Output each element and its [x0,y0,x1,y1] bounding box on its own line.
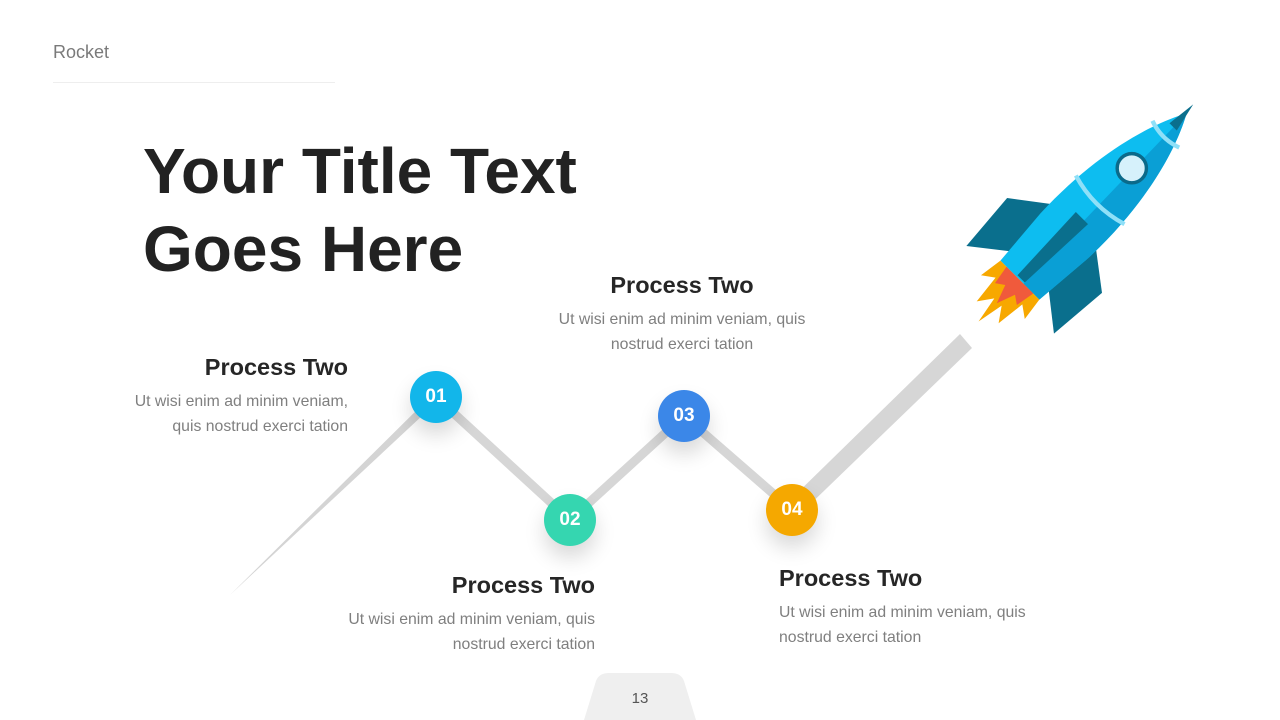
title [143,135,577,285]
circle 01: 01 [425,386,447,407]
text block 02: Process Two [452,572,595,598]
text block 04: nostrud exerci tation [779,629,921,646]
page number tab [584,673,696,720]
text block 01: Process Two [205,354,348,380]
circle 02 [544,494,596,546]
text block 03 [559,272,805,353]
text block 01: quis nostrud exerci tation [172,418,348,435]
circle 01 [410,371,462,423]
text block 03: nostrud exerci tation [611,336,753,353]
page number tab: 13 [632,690,648,707]
text block 02 [348,572,595,653]
text block 04 [779,565,1026,646]
title: Goes Here [143,213,463,285]
text block 04: Process Two [779,565,922,591]
text block 01 [135,354,348,435]
rocket [931,58,1242,369]
circle 02: 02 [559,509,581,530]
text block 03: Ut wisi enim ad minim veniam, quis [559,311,805,328]
circle 03 [658,390,710,442]
text block 01: Ut wisi enim ad minim veniam, [135,393,348,410]
path line [230,334,972,595]
title: Your Title Text [143,135,577,207]
text block 02: nostrud exerci tation [453,636,595,653]
circle 04: 04 [781,499,803,520]
circle 04 [766,484,818,536]
text block 03: Process Two [610,272,754,298]
header label: Rocket [53,42,109,62]
circle 03: 03 [673,405,695,426]
text block 04: Ut wisi enim ad minim veniam, quis [779,604,1026,621]
text block 02: Ut wisi enim ad minim veniam, quis [348,611,595,628]
